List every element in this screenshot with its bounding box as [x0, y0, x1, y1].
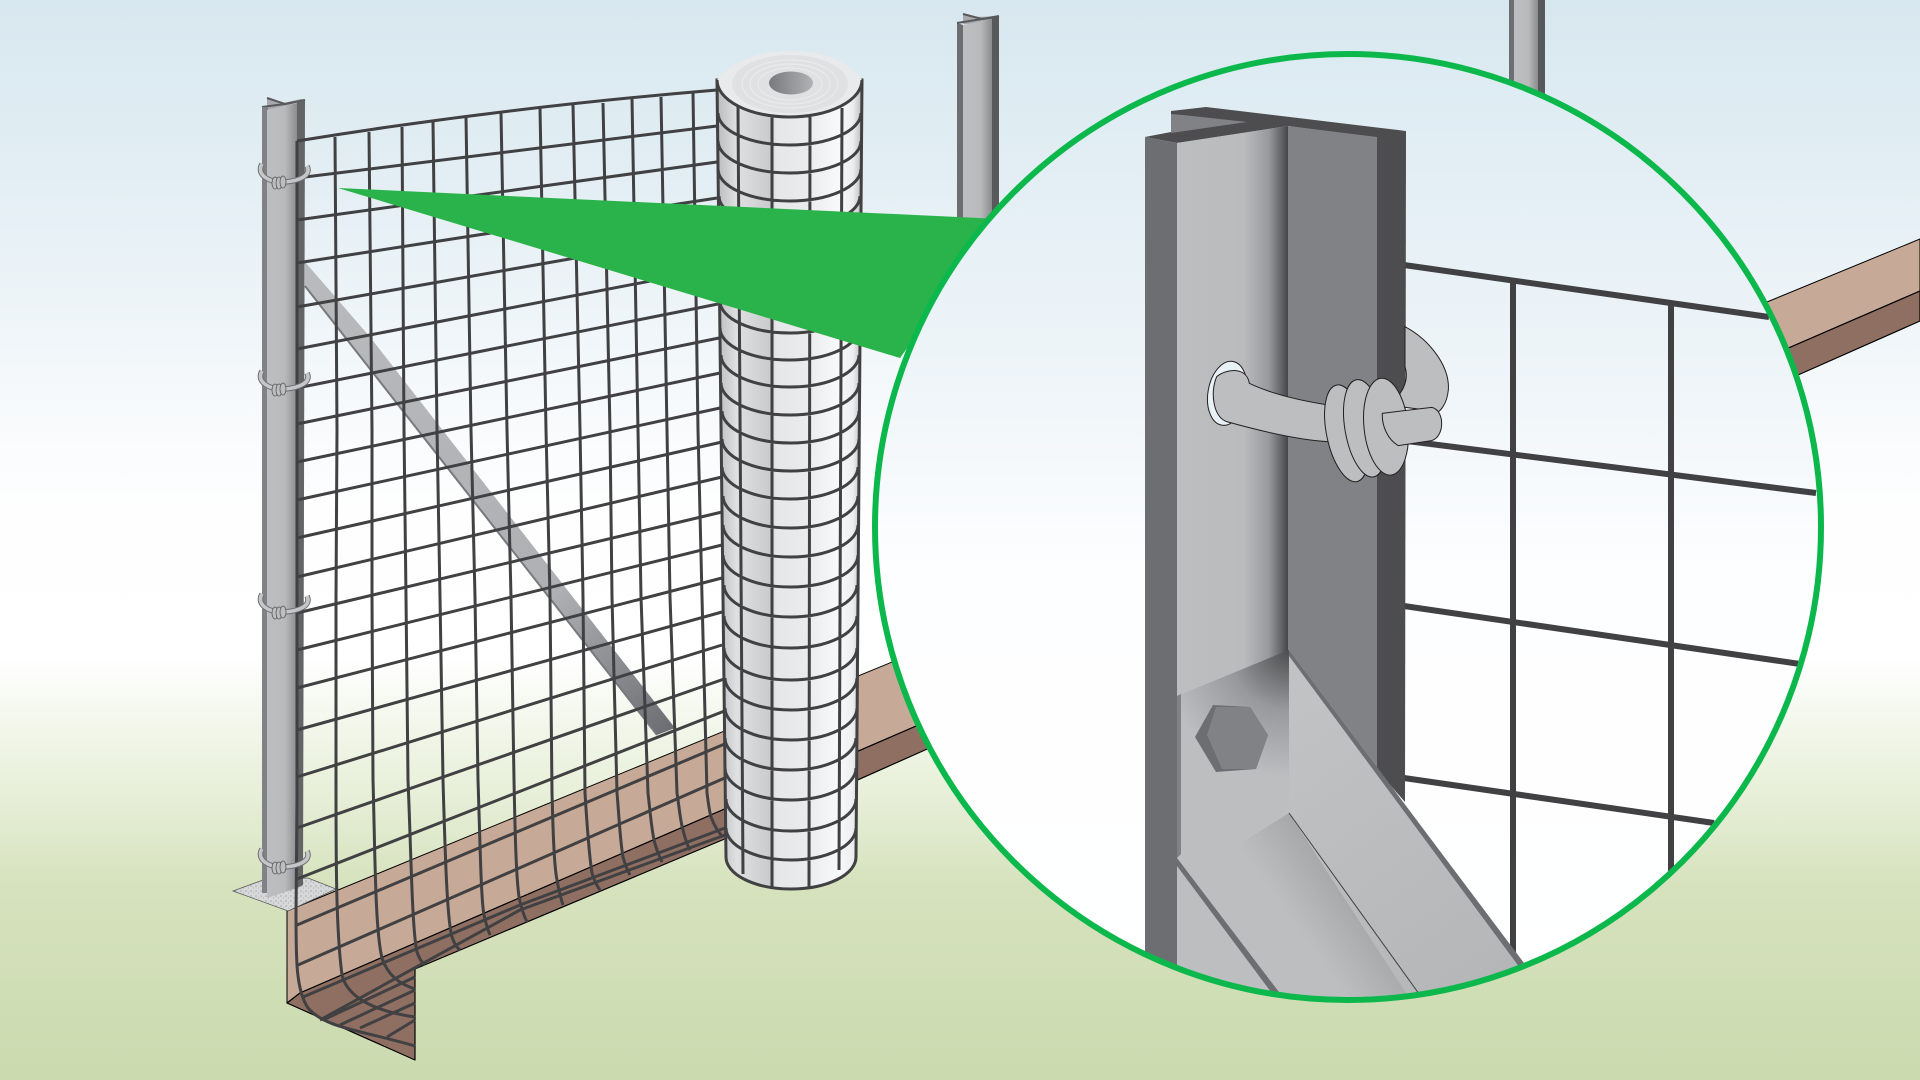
base plate — [233, 878, 336, 911]
mesh roll — [717, 51, 862, 889]
wire tie 1 — [260, 164, 308, 189]
bracket plate — [1177, 650, 1420, 1010]
detail mesh wires — [1404, 265, 1816, 960]
trench: buried mesh channel — [287, 239, 1920, 1060]
wire mesh panel — [296, 90, 727, 1046]
wire tie 2 — [260, 371, 308, 396]
detail post — [1145, 107, 1406, 1010]
wire tie 4 — [260, 849, 308, 874]
roll wires — [717, 80, 862, 888]
wire through post — [1213, 371, 1328, 442]
wire wraps — [1324, 384, 1365, 482]
hole in post — [1206, 360, 1246, 426]
detail circle magnified view — [875, 54, 1821, 1010]
circle interior — [875, 54, 1821, 1000]
trench floor — [287, 291, 1920, 1060]
far fence post — [957, 14, 999, 240]
wire knot — [1203, 327, 1448, 486]
wire tie 3 — [260, 594, 308, 619]
wire loop behind post — [1400, 327, 1448, 412]
background post behind detail circle — [1509, 0, 1545, 100]
diagonal brace — [305, 262, 675, 735]
clipped detail — [1145, 107, 1816, 1010]
diagonal brace face — [1289, 650, 1530, 1010]
mesh horizontal wires — [297, 90, 727, 1037]
mesh vertical wires — [296, 93, 723, 1046]
bolt — [1195, 705, 1268, 772]
near fence post — [262, 98, 305, 898]
roll body — [717, 80, 862, 889]
roll top — [717, 51, 862, 117]
wire end stub — [1382, 407, 1442, 446]
circle outline — [875, 54, 1821, 1000]
green callout pointer — [338, 188, 1000, 358]
trench back wall — [287, 239, 1920, 1003]
